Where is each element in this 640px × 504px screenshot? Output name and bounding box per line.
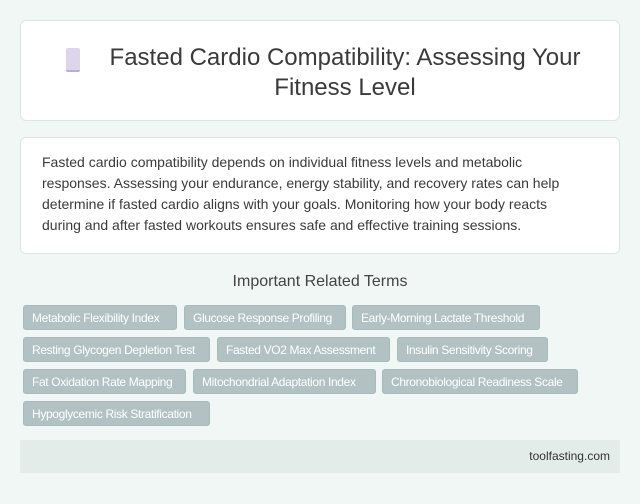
- title: Fasted Cardio Compatibility: Assessing Your Fitness Level: [110, 44, 580, 101]
- tag: Insulin Sensitivity Scoring: [406, 343, 533, 357]
- tag: Resting Glycogen Depletion Test: [32, 343, 195, 357]
- tag: Fat Oxidation Rate Mapping: [32, 375, 172, 389]
- tag: [397, 337, 548, 362]
- description card: [20, 137, 620, 254]
- tag: [23, 369, 186, 394]
- footer source text: toolfasting.com: [529, 449, 610, 463]
- tag: Metabolic Flexibility Index: [32, 311, 159, 325]
- tag: [23, 401, 210, 426]
- section heading: Important Related Terms: [233, 273, 407, 290]
- description text: Fasted cardio compatibility depends on individual fitness levels and metabolic responses. Assessing your endurance, energy stability, and recovery rates can help determine if fasted cardio aligns with your goals. Monitoring how your body reacts during and after fasted workouts ensures safe and effective training sessions.: [42, 154, 559, 233]
- footer: [20, 440, 620, 473]
- tag: Chronobiological Readiness Scale: [391, 375, 563, 389]
- icon: document: [66, 48, 80, 72]
- tag: [217, 337, 390, 362]
- header card: [20, 20, 620, 121]
- tag: Glucose Response Profiling: [193, 311, 332, 325]
- tag: [23, 305, 177, 330]
- tag: [382, 369, 578, 394]
- tag: Fasted VO2 Max Assessment: [226, 343, 375, 357]
- tag: [352, 305, 540, 330]
- tag: Early-Morning Lactate Threshold: [361, 311, 524, 325]
- tag: Mitochondrial Adaptation Index: [202, 375, 356, 389]
- tag: Hypoglycemic Risk Stratification: [32, 407, 192, 421]
- tag: [23, 337, 210, 362]
- tag: [193, 369, 376, 394]
- tag: [184, 305, 346, 330]
